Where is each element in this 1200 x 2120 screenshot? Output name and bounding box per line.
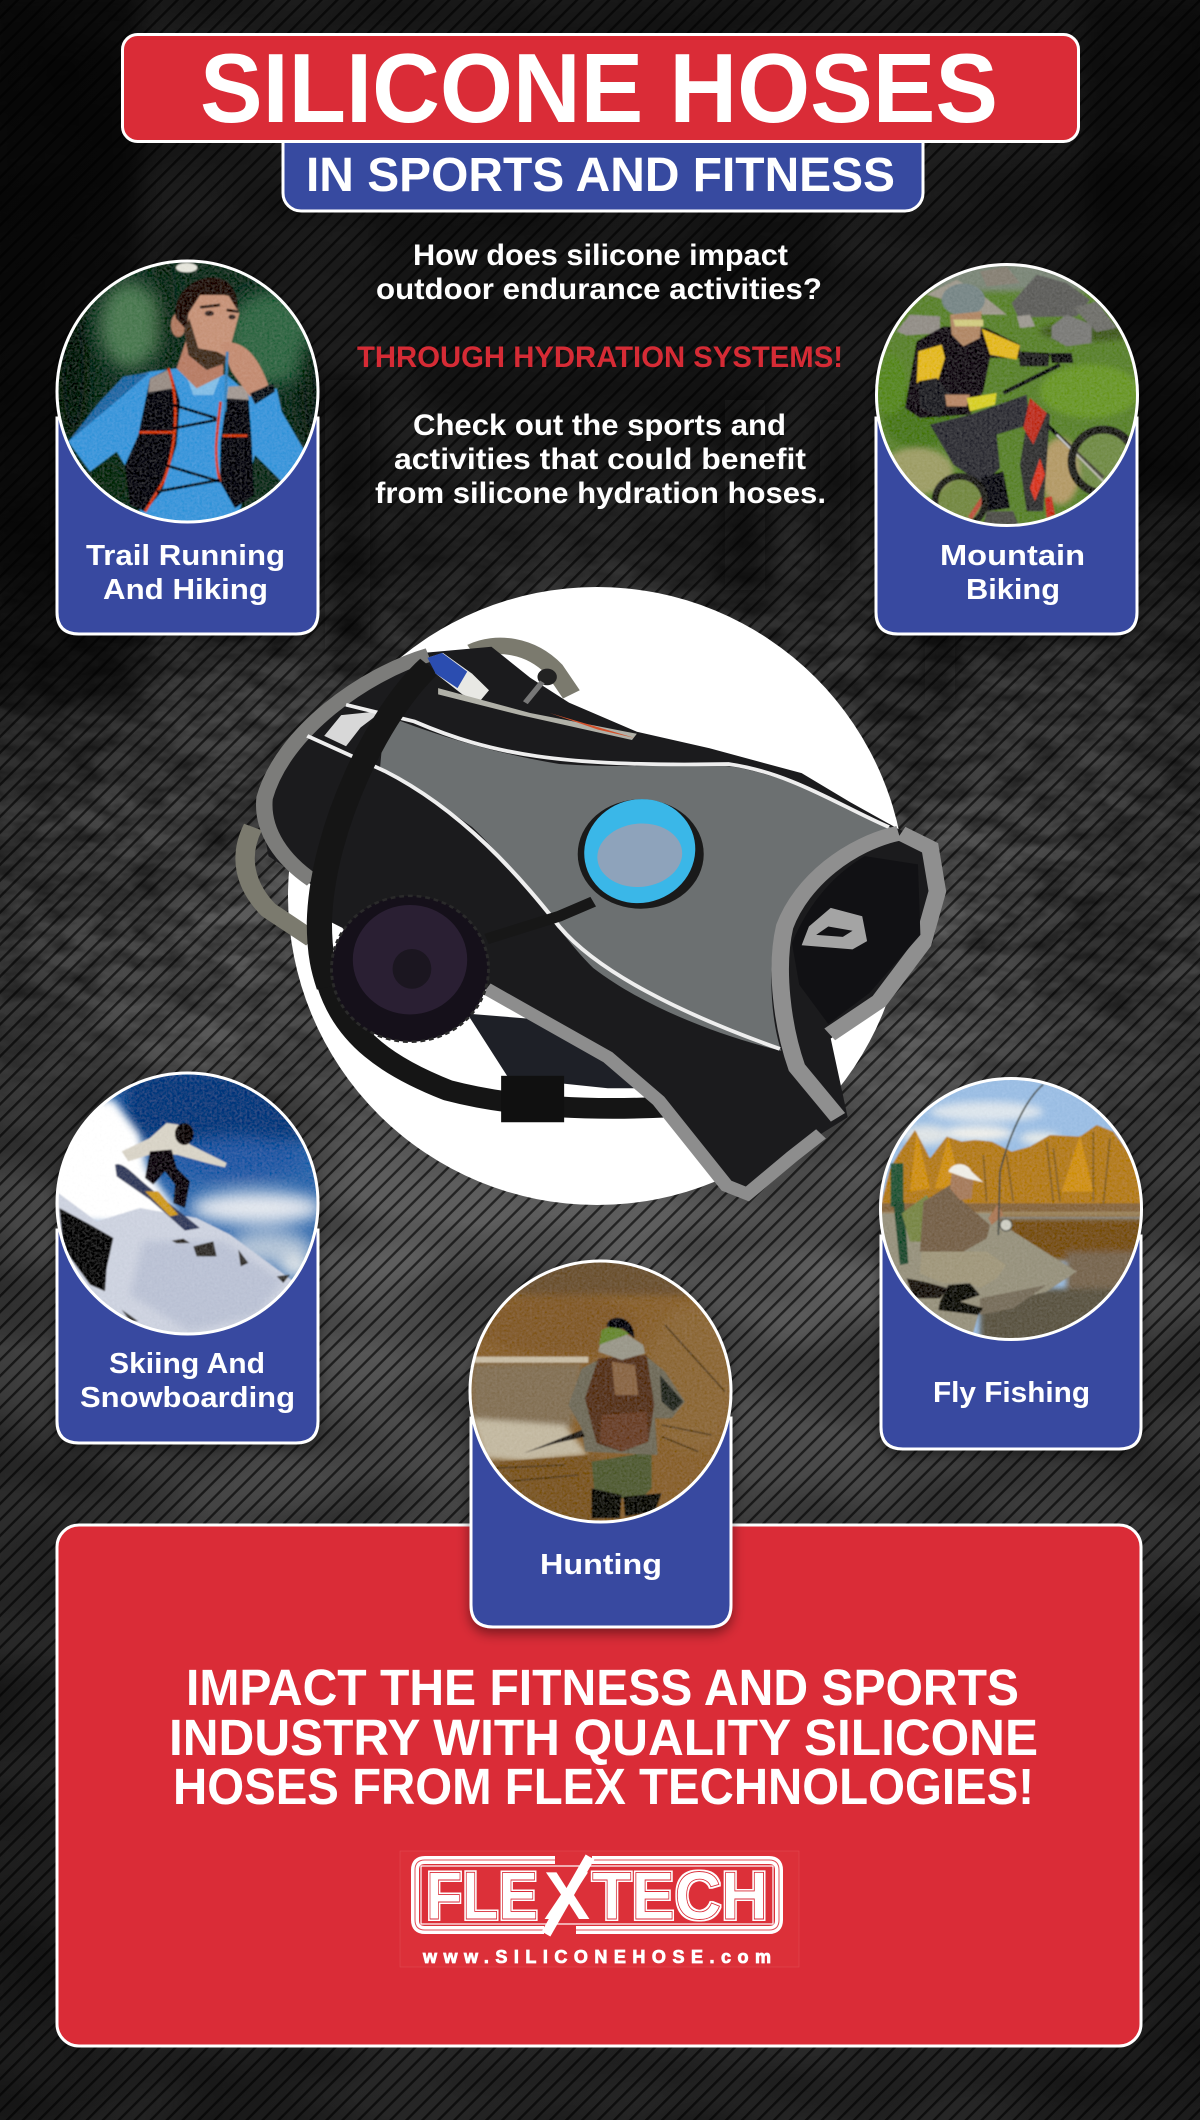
card: Trail Running And Hiking — [50, 255, 325, 634]
intro text — [357, 239, 843, 510]
panel: bottom call to action — [57, 1525, 1141, 2046]
blue port ring — [578, 799, 704, 909]
title panel: SILICONE HOSES — [200, 33, 998, 143]
label — [86, 540, 285, 606]
lower hose and mesh — [467, 1014, 656, 1088]
label: Skiing And — [109, 1348, 265, 1380]
portrait ring — [880, 1078, 1142, 1340]
call to action heading — [169, 1659, 1038, 1815]
card: Hunting — [465, 1255, 735, 1627]
photo: hunter in reeds — [465, 1255, 735, 1525]
portrait ring — [876, 264, 1138, 526]
label — [80, 1348, 295, 1414]
screw cap — [331, 896, 489, 1042]
portrait ring — [470, 1261, 731, 1522]
label — [940, 540, 1085, 606]
photo: mountain biker — [870, 258, 1145, 533]
logo: Flextech: www.SILICONEHOSE.com — [422, 1947, 771, 1967]
label: Mountain — [940, 540, 1085, 572]
back strap loops — [245, 646, 571, 939]
label: Snowboarding — [80, 1382, 295, 1414]
portrait ring — [57, 1073, 318, 1334]
card: Skiing And Snowboarding — [47, 1068, 325, 1443]
call to action heading: IMPACT THE FITNESS AND SPORTS — [186, 1659, 1019, 1716]
card: Fly Fishing — [880, 1075, 1145, 1449]
label: Fly Fishing — [933, 1377, 1090, 1409]
call to action heading: INDUSTRY WITH QUALITY SILICONE — [169, 1709, 1038, 1766]
pack body — [259, 647, 945, 1196]
intro text: activities that could benefit — [394, 443, 806, 476]
call to action heading: HOSES FROM FLEX TECHNOLOGIES! — [173, 1758, 1034, 1815]
intro text: from silicone hydration hoses. — [375, 477, 826, 510]
card: Mountain Biking — [870, 258, 1145, 634]
photo: snowboarder — [47, 1068, 325, 1340]
portrait ring — [57, 261, 318, 522]
label: And Hiking — [103, 574, 268, 606]
grey panel — [380, 715, 896, 1051]
intro text: How does silicone impact — [413, 239, 788, 272]
logo: Flextech: X — [544, 1858, 590, 1934]
logo: Flextech: TECH — [592, 1858, 768, 1934]
logo: Flextech: FLE — [426, 1858, 538, 1934]
central image: hydration backpack on white circle — [245, 587, 945, 1205]
grey edge binding — [264, 655, 428, 880]
bite valve — [429, 653, 489, 702]
intro text: Check out the sports and — [413, 409, 786, 442]
upper hose — [319, 666, 429, 987]
subtitle panel: IN SPORTS AND FITNESS — [306, 149, 895, 202]
side opening with mesh — [780, 833, 937, 1117]
white piping — [307, 705, 889, 1049]
intro text: THROUGH HYDRATION SYSTEMS! — [357, 341, 843, 374]
white reflective patch — [324, 711, 382, 746]
intro text: outdoor endurance activities? — [376, 273, 822, 306]
subtitle panel — [283, 125, 923, 211]
logo: Flextech — [400, 1851, 799, 1967]
title banner — [122, 33, 1078, 211]
label: Hunting — [540, 1549, 662, 1581]
photo: runner drinking from hydration tube — [50, 255, 325, 530]
photo: fly fisherman — [880, 1075, 1145, 1345]
label: Trail Running — [86, 540, 285, 572]
pocket zipper — [438, 688, 637, 740]
label: Biking — [966, 574, 1060, 606]
